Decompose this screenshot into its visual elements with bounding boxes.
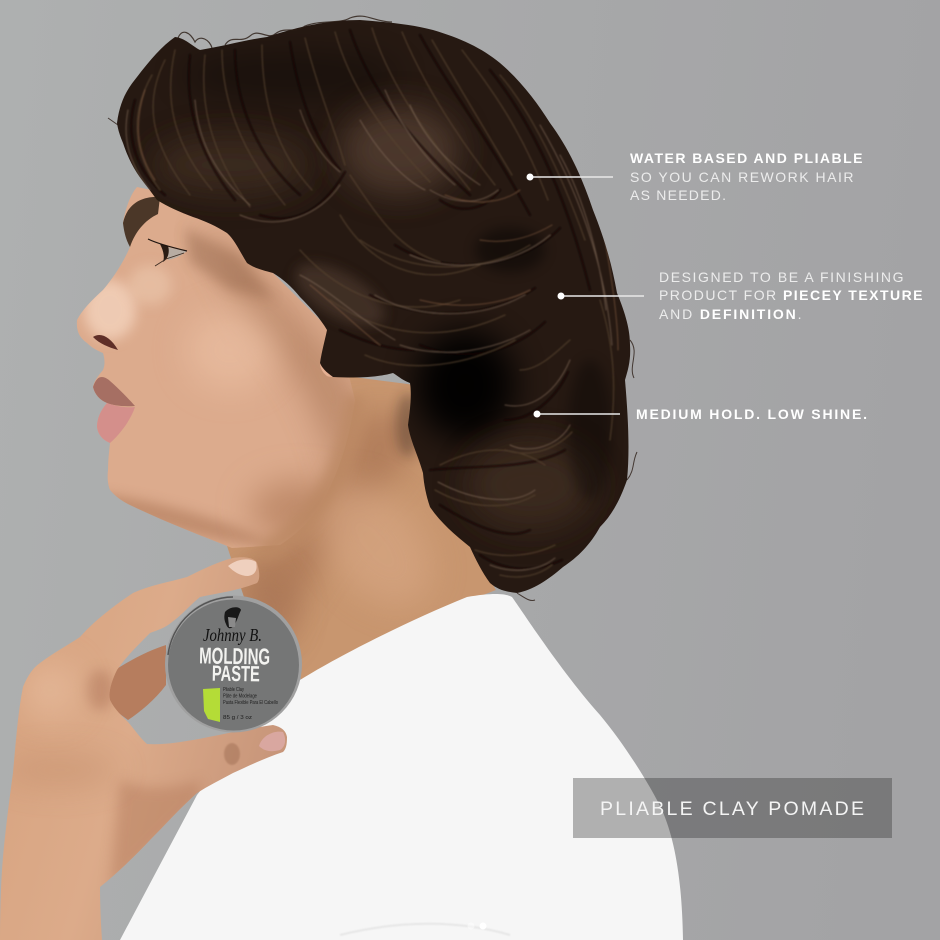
ear (320, 361, 354, 377)
hair tones (340, 105, 460, 195)
upper lip (93, 377, 135, 406)
callout: water based (526, 150, 862, 203)
product type label: PLIABLE CLAY POMADE (600, 798, 864, 820)
index fingernail (228, 559, 257, 576)
small print (223, 687, 278, 721)
neck (227, 378, 496, 680)
product name: MOLDING (199, 642, 270, 670)
product jar: Molding Paste (165, 596, 302, 732)
shirt (120, 594, 683, 940)
green label (203, 688, 220, 722)
callout text: MEDIUM HOLD. LOW SHINE. (636, 406, 867, 422)
small print: Pliable Clay (223, 687, 244, 693)
dark strands (131, 30, 590, 569)
lower lip (97, 403, 135, 443)
pointer (534, 410, 620, 418)
callout text: DESIGNED TO BE A FINISHING (659, 269, 904, 285)
palm, index finger and thumb (0, 557, 287, 940)
callout text: SO YOU CAN REWORK HAIR (630, 169, 854, 185)
hand shading (26, 666, 202, 878)
pointer (558, 292, 644, 300)
callout text (659, 269, 922, 322)
face shading (84, 225, 360, 553)
hand holding product (0, 557, 287, 940)
flyaway strands (108, 16, 637, 601)
eye (148, 239, 187, 266)
small print: Pâte de Modelage (223, 694, 257, 700)
pointer (526, 174, 613, 180)
callout text (630, 150, 862, 203)
brand logo: Johnny B. (203, 625, 262, 645)
product name (199, 642, 270, 687)
middle finger (105, 645, 166, 720)
product type label (573, 778, 892, 838)
callout text: PRODUCT FOR PIECEY TEXTURE (659, 287, 922, 303)
jaw blend into neck (262, 395, 355, 552)
face (77, 187, 355, 548)
mid strands (137, 28, 614, 577)
small print: 85 g / 3 oz (223, 715, 253, 721)
nostril (93, 335, 118, 350)
thumbnail (259, 732, 285, 751)
light strands (126, 90, 612, 570)
small print: Pasta Flexible Para El Cabello (223, 700, 278, 706)
thumb crease (224, 743, 240, 765)
warm strands (138, 90, 618, 350)
callout text: AS NEEDED. (630, 187, 726, 203)
callout text: WATER BASED AND PLIABLE (630, 150, 862, 166)
callout: finishing product (558, 269, 922, 322)
product name: PASTE (212, 661, 260, 686)
hair (100, 10, 650, 610)
carousel dots (468, 922, 486, 930)
callout: medium hold (534, 406, 867, 422)
callout text: AND DEFINITION. (659, 306, 802, 322)
soft nape hair (396, 393, 420, 457)
photo: model in profile (77, 10, 683, 940)
eyebrow (123, 197, 160, 247)
